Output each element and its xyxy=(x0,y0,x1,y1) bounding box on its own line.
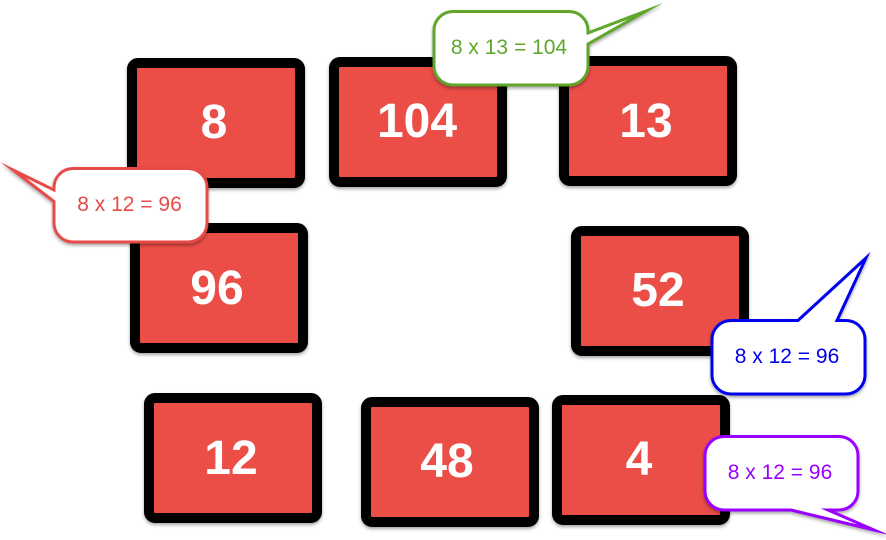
card: 96 xyxy=(135,228,303,348)
card: 48: 48 xyxy=(420,435,474,488)
card: 104 xyxy=(334,62,502,182)
callout: blue 8 x 12 = 96 xyxy=(712,258,866,394)
card: 8: 8 xyxy=(201,96,227,149)
card: 13: 13 xyxy=(619,95,673,148)
card: 12 xyxy=(149,398,317,518)
callout: red 8 x 12 = 96 xyxy=(13,168,207,242)
card: 8 xyxy=(132,63,300,183)
card: 52 xyxy=(576,231,744,351)
callout: blue 8 x 12 = 96: 8 x 12 = 96 xyxy=(735,345,839,368)
callout: red 8 x 12 = 96: 8 x 12 = 96 xyxy=(77,193,182,216)
callout: purple 8 x 12 = 96 xyxy=(705,436,874,530)
card: 52: 52 xyxy=(631,264,685,317)
callout: green 8 x 13 = 104: 8 x 13 = 104 xyxy=(451,36,567,59)
card: 96: 96 xyxy=(190,262,244,315)
card: 48 xyxy=(366,402,534,522)
callout: green 8 x 13 = 104 xyxy=(434,11,646,85)
card: 104: 104 xyxy=(377,95,457,148)
card: 12: 12 xyxy=(204,432,258,485)
card: 4: 4 xyxy=(626,433,653,486)
card: 4 xyxy=(557,400,725,520)
card: 13 xyxy=(564,61,732,181)
callout: purple 8 x 12 = 96: 8 x 12 = 96 xyxy=(728,461,832,484)
